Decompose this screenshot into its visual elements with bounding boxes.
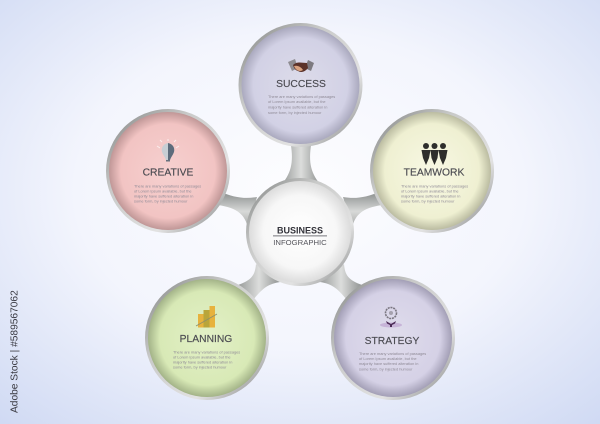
icon: handshake — [288, 59, 314, 72]
icon: gear with figure — [380, 308, 402, 328]
description: majority have suffered alteration in — [173, 360, 232, 364]
description — [401, 184, 468, 204]
description: majority have suffered alteration in — [359, 361, 418, 366]
heading: CREATIVE — [143, 168, 193, 178]
description: majority have suffered alteration in — [268, 104, 327, 110]
description — [134, 184, 201, 204]
description: of Lorem Ipsum available, but the — [268, 99, 326, 104]
description: some form, by injected humour — [268, 110, 322, 115]
description: of Lorem Ipsum available, but the — [173, 354, 231, 360]
connector arms — [218, 140, 382, 304]
icon: bar chart — [196, 306, 217, 328]
center circle: business infographic — [246, 178, 354, 286]
description — [268, 94, 335, 115]
stock credit: Adobe Stock | #589567062 — [10, 290, 20, 413]
description: some form, by injected humour — [359, 366, 413, 372]
description: of Lorem Ipsum available, but the — [359, 356, 417, 361]
circle: strategy — [331, 276, 455, 400]
circle: creative — [106, 109, 230, 233]
description: There are many variations of passages — [268, 94, 335, 99]
description: some form, by injected humour — [134, 198, 188, 204]
heading: STRATEGY — [365, 336, 419, 347]
heading: SUCCESS — [276, 79, 326, 90]
circle: teamwork — [370, 109, 494, 233]
description: of Lorem Ipsum available, but the — [134, 188, 192, 194]
center subtitle: INFOGRAPHIC — [273, 238, 327, 247]
description: There are many variations of passages — [401, 184, 468, 188]
heading: PLANNING — [180, 334, 232, 345]
center title: BUSINESS — [277, 226, 323, 236]
description: some form, by injected humour — [401, 198, 455, 204]
description: There are many variations of passages — [173, 350, 240, 354]
description: majority have suffered alteration in — [134, 194, 193, 198]
description: of Lorem Ipsum available, but the — [401, 188, 459, 194]
description: majority have suffered alteration in — [401, 194, 460, 198]
description: some form, by injected humour — [173, 364, 227, 370]
description: There are many variations of passages — [359, 351, 426, 356]
description — [359, 351, 426, 372]
description: There are many variations of passages — [134, 184, 201, 188]
icon: three people — [422, 143, 448, 165]
circle: planning — [145, 276, 269, 400]
icon: light bulb — [157, 139, 179, 162]
circle: success — [238, 23, 362, 147]
description — [173, 350, 240, 370]
heading: TEAMWORK — [404, 168, 464, 178]
